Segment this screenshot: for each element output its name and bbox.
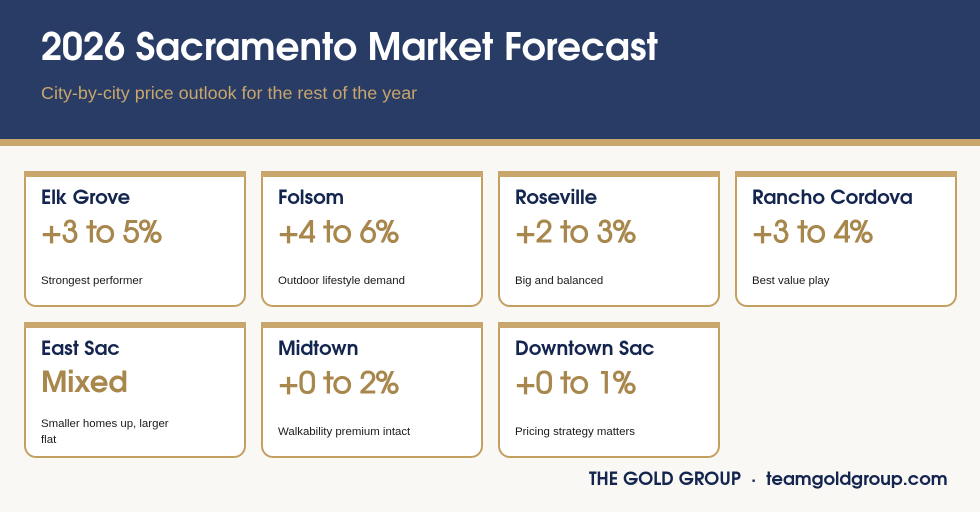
panel: Roseville [498,171,720,307]
panel: Elk Grove [24,171,246,307]
note: Best value play [752,275,829,287]
forecast value: +3 to 4% [752,220,873,248]
footer brand line: THE GOLD GROUP · teamgoldgroup.com [589,473,948,489]
note: Big and balanced [515,275,603,287]
forecast value: +2 to 3% [515,220,636,248]
subtitle: City-by-city price outlook for the rest of the year [41,83,417,103]
forecast value: +3 to 5% [41,220,162,248]
forecast value: Mixed [41,371,128,398]
title: 2026 Sacramento Market Forecast [41,32,658,67]
city name: Downtown Sac [515,341,655,359]
city name: East Sac [41,341,120,359]
note: Smaller homes up, larger flat [41,418,169,446]
city name: Midtown [278,341,359,359]
note: Outdoor lifestyle demand [278,275,405,287]
panel: Rancho Cordova [735,171,957,307]
note: Walkability premium intact [278,426,410,438]
gold header rule [0,139,980,146]
city name: Rancho Cordova [752,190,913,208]
city name: Elk Grove [41,190,130,208]
note: Strongest performer [41,275,143,287]
panel: Folsom [261,171,483,307]
forecast value: +4 to 6% [278,220,399,248]
forecast value: +0 to 1% [515,371,636,399]
panel: Downtown Sac [498,322,720,458]
city name: Roseville [515,190,597,208]
panel: Midtown [261,322,483,458]
note: Pricing strategy matters [515,426,635,438]
panel: East Sac [24,322,246,458]
forecast value: +0 to 2% [278,371,399,399]
header banner [0,0,980,139]
city name: Folsom [278,190,344,208]
